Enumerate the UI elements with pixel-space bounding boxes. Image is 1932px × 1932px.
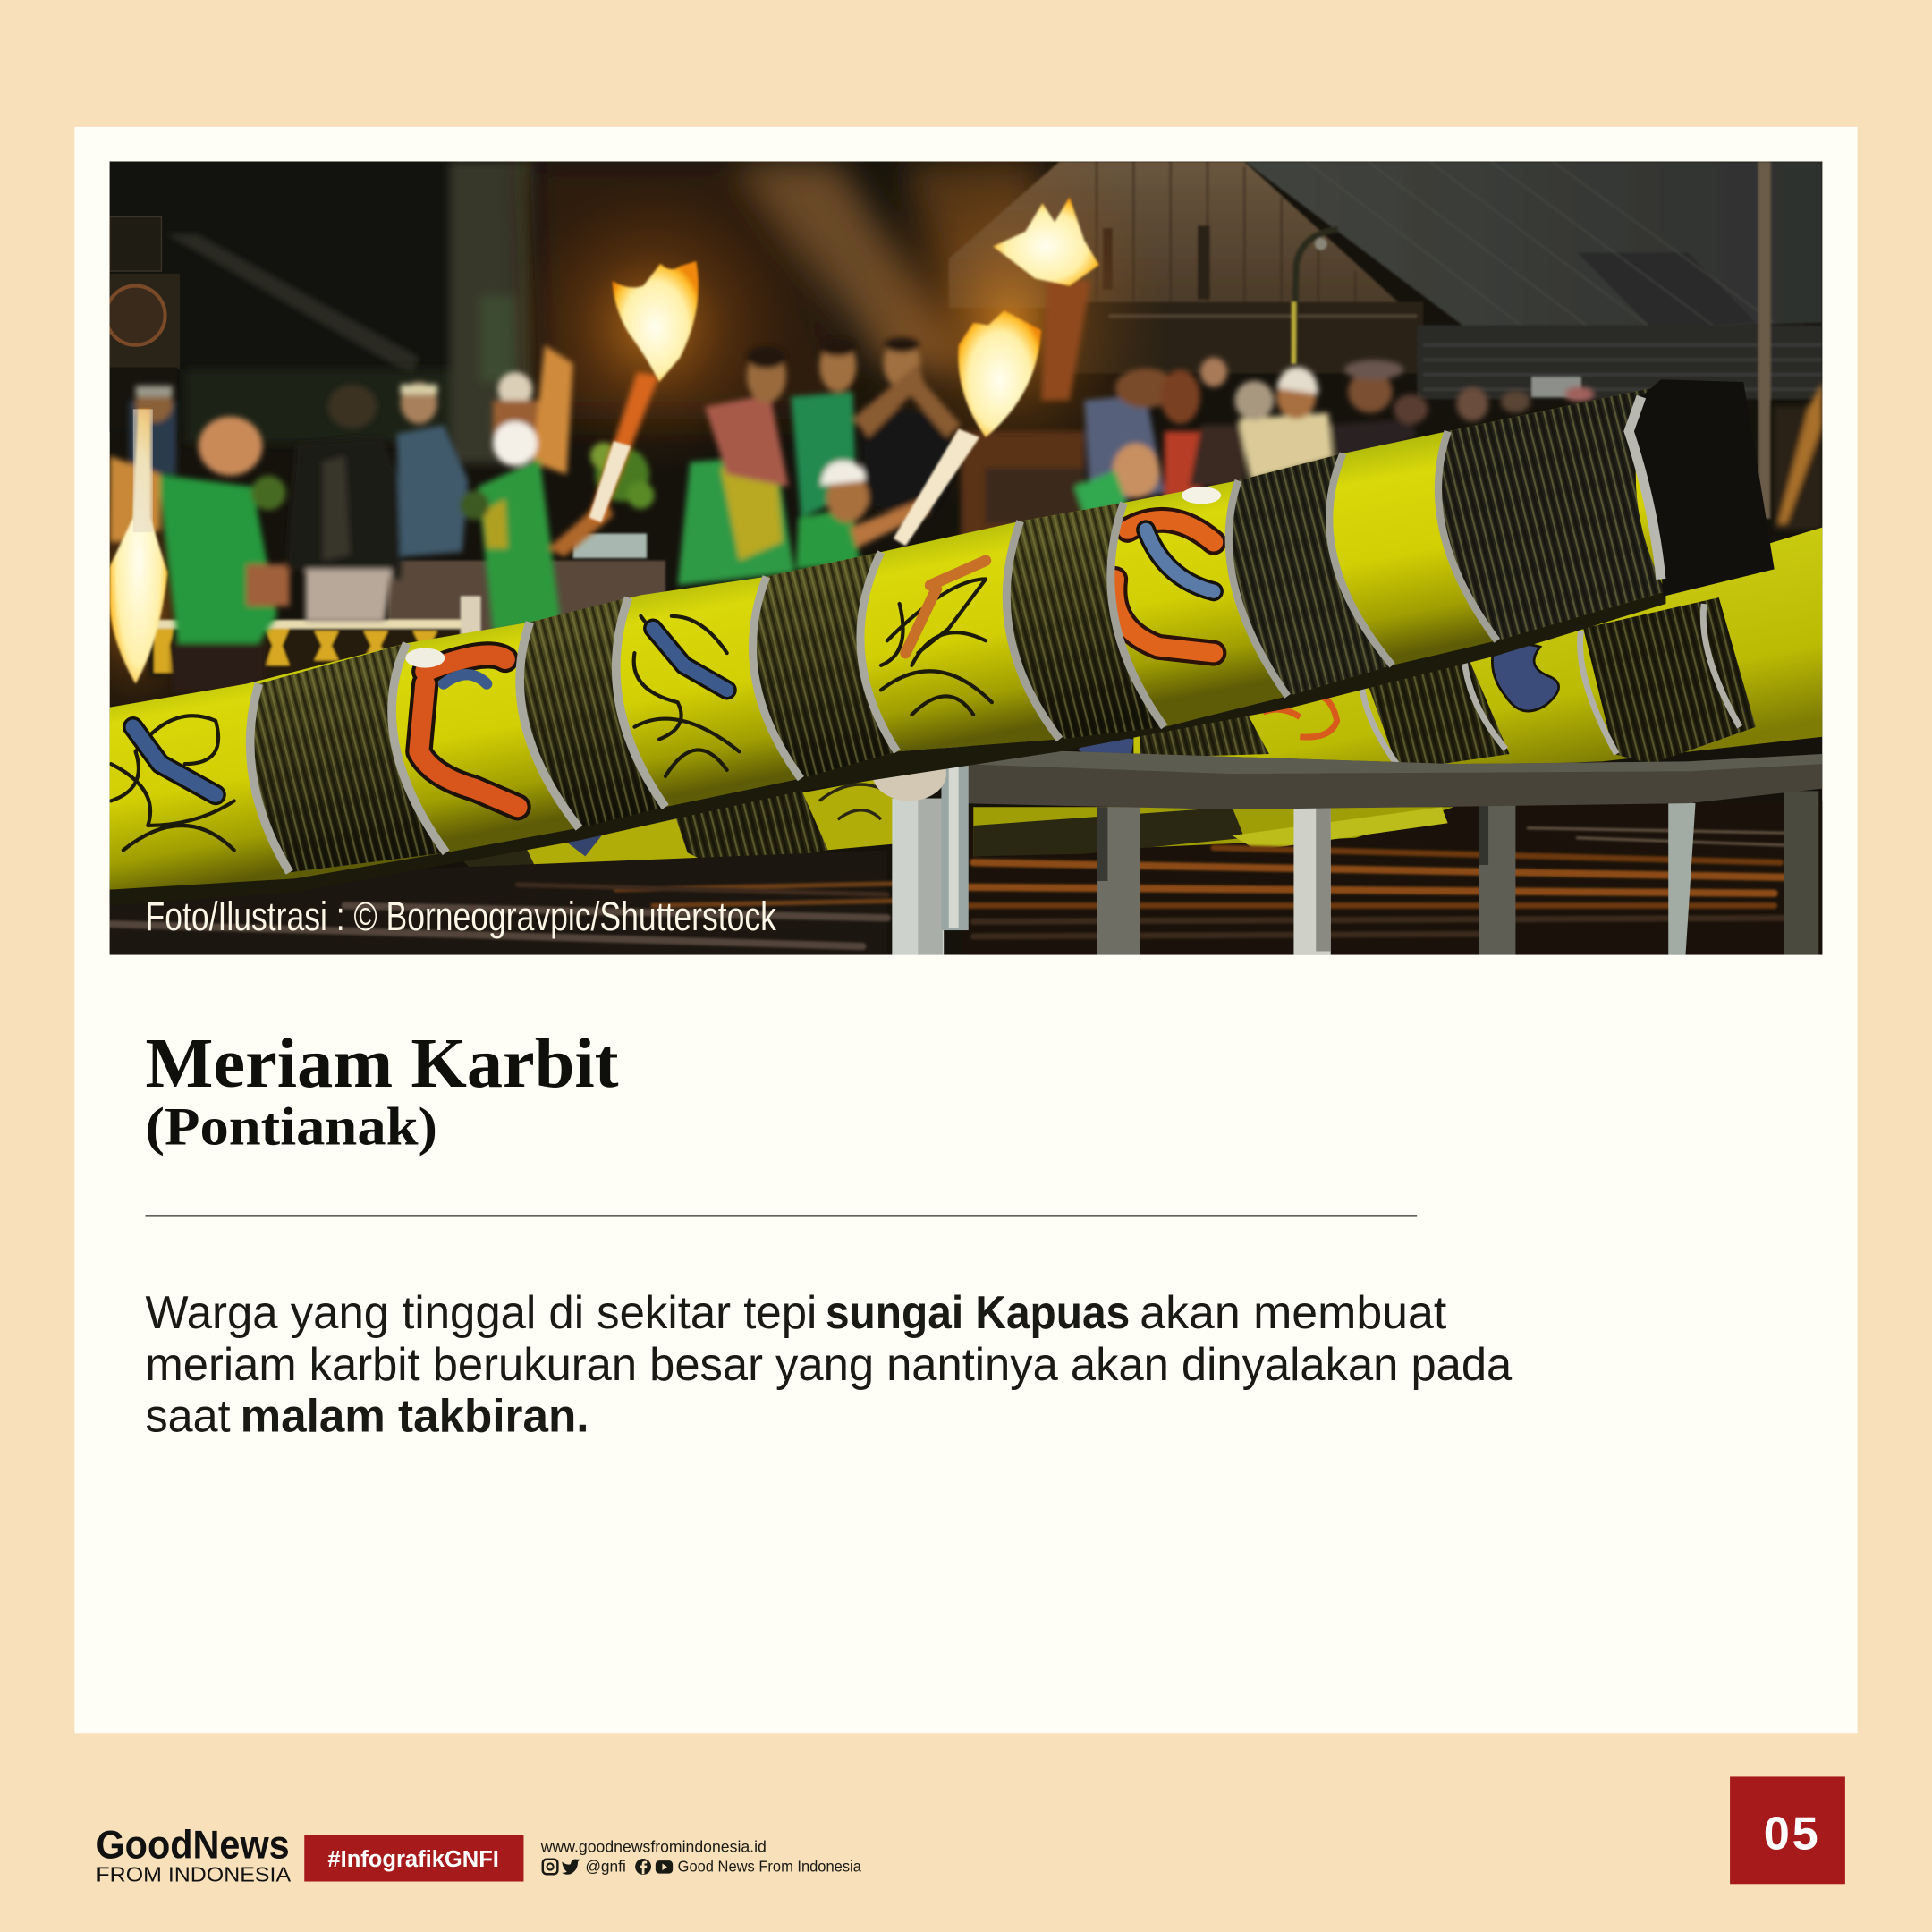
body text — [146, 1287, 1513, 1443]
background: warm light rays — [530, 161, 1047, 419]
website and social handles: www.goodnewsfromindonesia.id — [540, 1837, 767, 1855]
website and social handles — [540, 1837, 861, 1875]
wire band 5 — [1229, 453, 1393, 696]
front cannon — [110, 379, 1775, 905]
wire band 4 — [1006, 503, 1165, 740]
crowd at center — [678, 337, 961, 585]
page number badge: 05 — [1764, 1809, 1821, 1860]
website and social handles: @gnfi — [585, 1857, 626, 1875]
content card — [49, 123, 1858, 1733]
page number badge — [1730, 1776, 1845, 1884]
icon: instagram — [543, 1860, 557, 1874]
flame glows — [109, 161, 1143, 707]
background: dark stage left — [106, 161, 533, 463]
body text: malam takbiran. — [241, 1391, 589, 1443]
icon: youtube — [656, 1860, 673, 1874]
icon: facebook — [635, 1859, 651, 1875]
hashtag badge: #InfografikGNFI — [327, 1845, 499, 1872]
wire band 6 and cannon mouth — [1438, 379, 1775, 640]
crowd at right — [961, 357, 1822, 542]
subtitle: (Pontianak) — [146, 1097, 437, 1157]
body text: Warga yang tinggal di sekitar tepi — [146, 1287, 817, 1339]
floor: stacked timber — [110, 801, 1822, 955]
website and social handles: Good News From Indonesia — [678, 1857, 861, 1875]
stage table and fence — [148, 533, 665, 678]
body text: akan membuat — [1140, 1287, 1447, 1339]
body text: sungai Kapuas — [826, 1287, 1130, 1339]
footer logo: GoodNews From Indonesia: FROM INDONESIA — [96, 1863, 292, 1886]
crowd on the stage, left — [110, 345, 654, 692]
background: wooden building — [949, 161, 1423, 373]
footer logo: GoodNews From Indonesia: GoodNews — [96, 1823, 290, 1867]
divider rule — [146, 1215, 1417, 1216]
wire band 1 — [250, 643, 446, 872]
scaffold beam and posts — [873, 746, 1823, 955]
title: Meriam Karbit — [146, 1024, 619, 1103]
wire band 2 — [520, 597, 665, 828]
torches and flames — [110, 197, 1099, 684]
rear cannon — [456, 528, 1822, 887]
footer logo: GoodNews From Indonesia — [96, 1823, 292, 1886]
body text: meriam karbit berukuran besar yang nantinya akan dinyalakan pada — [146, 1339, 1513, 1391]
painted ornaments — [111, 520, 1214, 851]
hashtag badge — [304, 1835, 523, 1882]
photo: meriam karbit cannons — [49, 123, 1822, 955]
photo credit caption: Foto/Ilustrasi : © Borneogravpic/Shutterstock — [146, 894, 776, 939]
background: corrugated roof — [1244, 161, 1822, 519]
body text: saat — [146, 1391, 231, 1443]
wire band 3 — [753, 552, 897, 779]
icon: twitter — [562, 1859, 580, 1875]
